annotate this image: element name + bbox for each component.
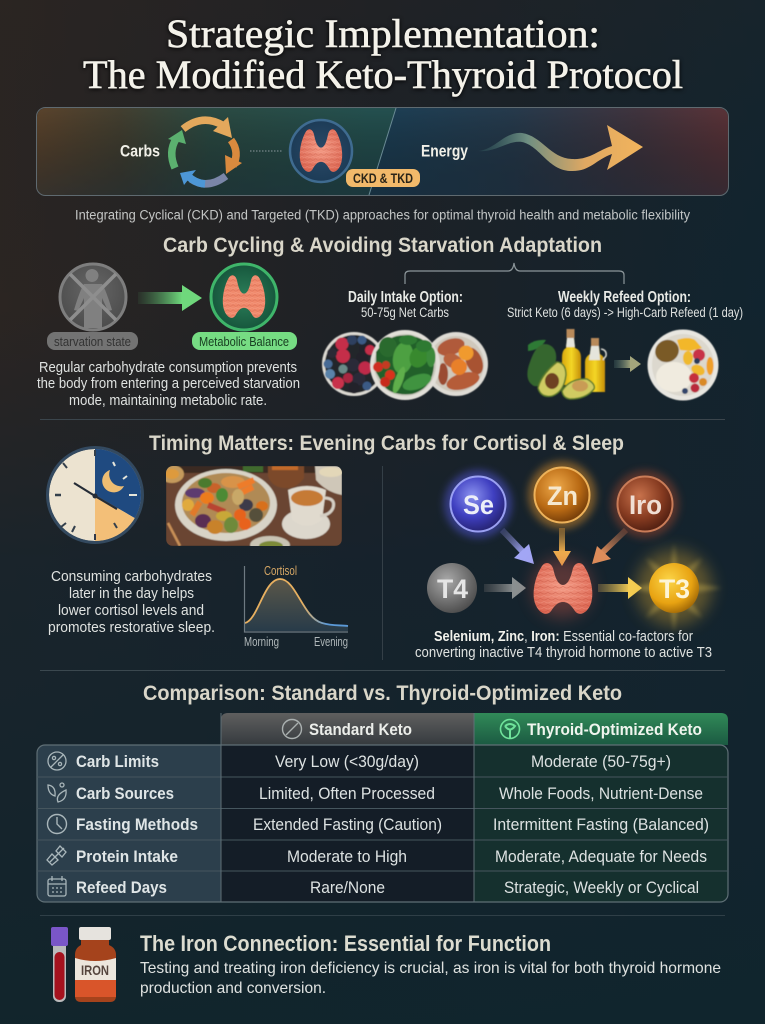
icon: T3 [626, 543, 722, 633]
panel: daily intake option [322, 289, 488, 400]
text: starvation explanation: mode, maintaining metabolic rate. [69, 392, 267, 409]
plate: refeed meal [648, 330, 718, 400]
icon: day night clock [48, 445, 145, 545]
text: daily amount: 50-75g Net Carbs [361, 305, 449, 320]
table body background [37, 745, 728, 902]
row: carb limits: Very Low (<30g/day) [275, 752, 419, 771]
row: carb limits: Moderate (50-75g+) [531, 752, 671, 771]
plate: sweet potatoes [424, 332, 488, 396]
text: carb timing explanation: Consuming carbohydrates [51, 568, 212, 585]
arrow: to balance [138, 285, 202, 311]
chart: cortisol curve: Morning [244, 635, 279, 649]
text: weekly heading: Weekly Refeed Option: [558, 289, 691, 306]
arrow: selenium to thyroid [502, 530, 534, 564]
text: starvation explanation: the body from entering a perceived starvation [37, 375, 300, 392]
row: carb limits [48, 752, 671, 771]
icon: iron: Iro [629, 490, 662, 520]
panel: iron connection [51, 927, 721, 1002]
text: iron explanation: Testing and treating iron deficiency is crucial, as iron is vital for both thyroid hormone [140, 960, 721, 977]
text: co-factor caption: converting inactive T4 thyroid hormone to active T3 [415, 644, 712, 661]
icon: zinc: Zn [547, 481, 578, 511]
title: Strategic Implementation: [166, 11, 600, 56]
icon: T4: T4 [437, 574, 468, 604]
text: carb timing explanation: lower cortisol levels and [58, 602, 204, 619]
heading: timing matters: Timing Matters: Evening Carbs for Cortisol & Sleep [149, 432, 624, 455]
chart: cortisol curve: Evening [314, 635, 348, 649]
icon: zinc [528, 461, 596, 529]
icon: selenium [444, 470, 512, 538]
row: protein intake: Moderate to High [287, 847, 407, 866]
text: carb timing explanation: later in the day helps [69, 585, 194, 602]
arrow: thyroid to T3 [598, 577, 642, 599]
text: iron explanation [140, 960, 721, 997]
arrow: energy wave [478, 125, 643, 171]
text: starvation explanation [37, 359, 300, 409]
text: carb timing explanation: promotes restorative sleep. [48, 619, 215, 636]
row: refeed days: Refeed Days [76, 878, 167, 897]
row: carb sources: Carb Sources [76, 784, 174, 803]
vertical divider [382, 466, 383, 660]
icon: blood test tube [51, 927, 68, 1002]
text: co-factor caption [415, 628, 712, 661]
row: fasting methods: Extended Fasting (Caution) [253, 815, 442, 834]
panel: starvation to balance [37, 264, 300, 409]
row: carb sources: Limited, Often Processed [259, 784, 435, 803]
table header: standard keto: Standard Keto [309, 720, 412, 739]
icon: thyroid badge [290, 120, 352, 182]
arrow: T4 to thyroid [484, 577, 526, 599]
table header: thyroid-optimized keto: Thyroid-Optimized Keto [527, 720, 702, 739]
arrow: iron to thyroid [592, 530, 626, 564]
divider [40, 915, 725, 916]
icon: cycle arrows [168, 117, 242, 185]
label: carbs: Carbs [120, 142, 160, 160]
table header: thyroid-optimized keto [474, 713, 728, 745]
divider [40, 419, 725, 420]
row: protein intake [47, 846, 707, 866]
row: protein intake: Moderate, Adequate for Needs [495, 847, 707, 866]
text: carb timing explanation [48, 568, 215, 636]
plate: berries [322, 332, 386, 396]
text: co-factor caption: Selenium, Zinc, Iron: Essential co-factors for [434, 628, 693, 645]
icon: iron [611, 470, 679, 538]
label: metabolic balance: Metabolic Balance [199, 334, 289, 349]
icon: metabolic balance [211, 264, 277, 330]
icon: iron bottle: IRON [81, 962, 109, 978]
bracket [405, 263, 624, 284]
panel: carbs to energy banner [36, 108, 728, 196]
comparison table [37, 713, 728, 902]
plate: spinach [370, 330, 440, 400]
row: refeed days: Strategic, Weekly or Cyclical [504, 878, 699, 897]
table header: standard keto [221, 713, 474, 745]
text: starvation explanation: Regular carbohydrate consumption prevents [39, 359, 297, 376]
label: energy: Energy [421, 142, 469, 160]
panel: weekly refeed option [507, 289, 743, 400]
label: starvation state: starvation state [54, 334, 131, 349]
arrow: refeed [614, 356, 641, 372]
heading: carb cycling: Carb Cycling & Avoiding Starvation Adaptation [163, 234, 602, 257]
subtitle: Integrating Cyclical (CKD) and Targeted (TKD) approaches for optimal thyroid health and metabolic flexibility [75, 208, 690, 222]
row: refeed days [48, 876, 699, 897]
arrow: zinc to thyroid [553, 528, 571, 566]
divider [40, 670, 725, 671]
icon: T4 [427, 563, 477, 613]
chart: cortisol curve: Cortisol [264, 564, 297, 578]
heading: iron connection: The Iron Connection: Essential for Function [140, 931, 551, 956]
panel: timing [48, 445, 348, 649]
row: protein intake: Protein Intake [76, 847, 178, 866]
row: refeed days: Rare/None [310, 878, 385, 897]
row: fasting methods: Intermittent Fasting (Balanced) [493, 815, 709, 834]
icon: starvation state [60, 264, 126, 330]
panel: mineral co-factors [415, 461, 722, 661]
icon: iron bottle [75, 927, 116, 1002]
icon: avocado and oils [527, 329, 606, 399]
image: evening meal with tea [166, 466, 342, 546]
title: The Modified Keto-Thyroid Protocol [83, 52, 683, 97]
row: fasting methods [48, 814, 709, 834]
text: daily heading: Daily Intake Option: [348, 289, 463, 306]
icon: thyroid gland [532, 558, 592, 618]
title [83, 11, 683, 97]
text: iron explanation: production and conversion. [140, 980, 326, 997]
icon: T3: T3 [659, 574, 690, 604]
row: carb limits: Carb Limits [76, 752, 159, 771]
row: carb sources: Whole Foods, Nutrient-Dense [499, 784, 703, 803]
row: fasting methods: Fasting Methods [76, 815, 198, 834]
row: carb sources [48, 783, 703, 803]
heading: comparison: Comparison: Standard vs. Thyroid-Optimized Keto [143, 682, 622, 705]
badge: CKD and TKD: CKD & TKD [353, 170, 413, 186]
chart: cortisol curve [244, 564, 348, 649]
icon: selenium: Se [463, 490, 494, 520]
